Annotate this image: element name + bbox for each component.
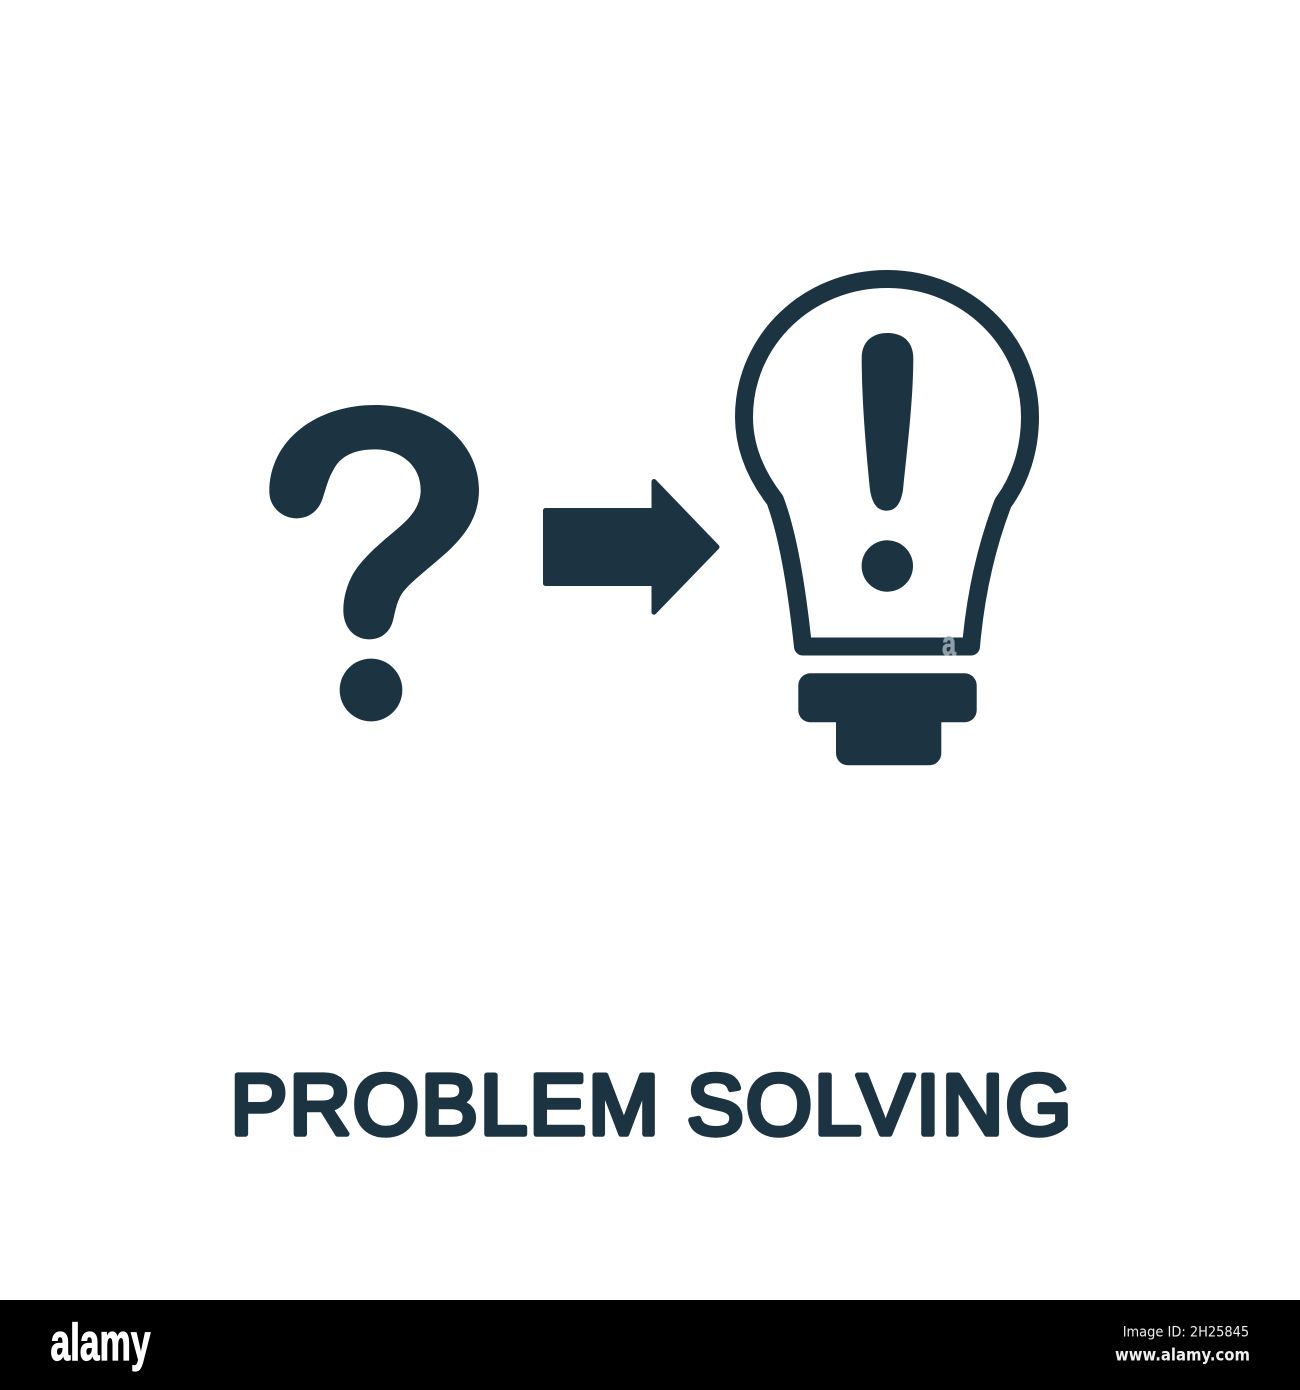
website: www.alamy.com bbox=[1115, 1346, 1250, 1365]
icon: question mark bbox=[269, 405, 479, 721]
icon: light bulb with exclamation mark bbox=[744, 279, 1030, 765]
arrow: question to idea bbox=[546, 482, 717, 612]
image id: Image ID: 2H25845 bbox=[1123, 1325, 1249, 1341]
footer bar bbox=[0, 1300, 1300, 1390]
watermark letter: a bbox=[942, 625, 957, 663]
bulb outline bbox=[744, 279, 1030, 646]
title: PROBLEM SOLVING bbox=[230, 1058, 1072, 1153]
exclamation mark bbox=[862, 333, 913, 592]
logo: alamy: alamy bbox=[50, 1314, 151, 1372]
bulb base bbox=[798, 673, 977, 765]
